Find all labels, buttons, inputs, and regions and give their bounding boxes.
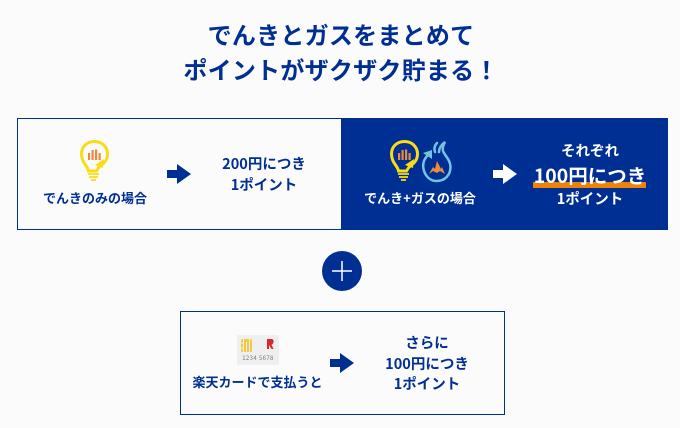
panel: electricity plus gas dark side [341,118,668,230]
text: additional 100 yen per point: さらに [405,332,449,353]
text: 200 yen per point [222,153,306,194]
icon: plus circle [322,251,362,291]
text: additional 100 yen per point: 100円につき [385,352,469,374]
text: additional 100 yen per point [385,332,469,394]
label: pay with Rakuten card: 楽天カードで支払うと [192,372,323,391]
title: ポイントがザクザク貯まる！ [183,51,499,86]
icon: light bulb [80,140,109,181]
text: 200 yen per point: 1ポイント [231,174,297,194]
title [183,16,499,86]
arrow: Rakuten card [330,353,354,373]
highlight underline [533,182,646,188]
text: 100 yen per: 100円につき [534,160,646,189]
text: additional 100 yen per point: 1ポイント [394,373,460,394]
icon: credit card [237,335,279,365]
arrow: electricity only [167,164,191,184]
title: でんきとガスをまとめて [208,16,474,51]
label: electricity only: でんきのみの場合 [43,188,147,207]
text: 1 point: 1ポイント [557,188,623,209]
panel: electricity and gas comparison [17,118,668,230]
icon: light bulb on dark [390,140,419,181]
icon: gas flame [422,141,452,182]
icon: credit card: 1234 5678 [242,353,274,362]
text: 200 yen per point: 200円につき [222,153,306,174]
text: each: それぞれ [561,140,619,161]
panel: Rakuten card [180,311,505,415]
label: electricity plus gas: でんき+ガスの場合 [364,188,476,207]
arrow: electricity plus gas [493,164,517,184]
